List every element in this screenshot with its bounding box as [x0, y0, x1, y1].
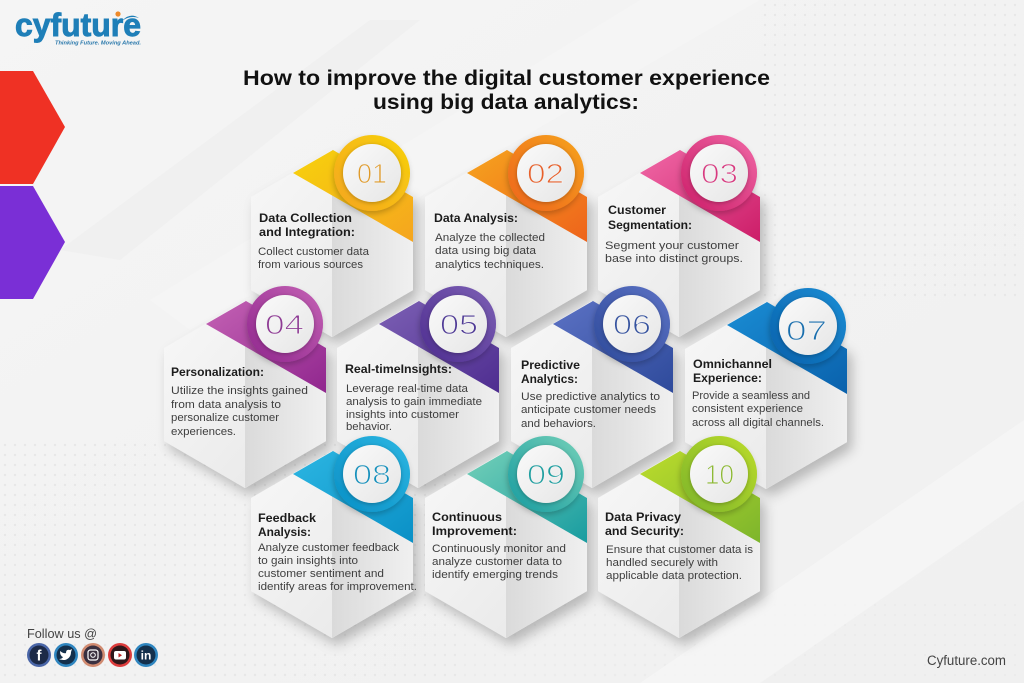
panel: 06 Predictive Analytics: Predictive	[521, 358, 580, 372]
panel: 02 Data Analysis: data using big data	[435, 245, 537, 257]
panel: 04 Personalization: 04	[265, 309, 304, 340]
panel: 08 Feedback Analysis	[251, 436, 417, 638]
panel: 03 Customer Segmentation	[598, 135, 760, 337]
panel: 05 Real-time Insights: 05	[440, 309, 478, 340]
panel: 02 Data Analysis: 02	[527, 158, 564, 189]
panel: 04 Personalization: Utilize the insights gained	[171, 385, 308, 397]
panel: 08 Feedback Analysis: customer sentiment and	[258, 568, 384, 580]
panel: 01 Data Collection and Integration: Collect customer data	[258, 246, 370, 258]
title	[243, 66, 770, 114]
panel: 07 Omnichannel Experience: across all digital channels.	[692, 417, 824, 429]
panel: 05 Real-time Insights: analysis to gain immediate	[346, 396, 482, 408]
panel: 09 Continuous Improvement: Continuously monitor and	[432, 543, 566, 555]
panel: 03 Customer Segmentation: 03	[701, 158, 738, 189]
panel: 09 Continuous Improvement: 09	[527, 459, 565, 490]
panel: 09 Continuous Improvement: Continuous	[432, 510, 502, 524]
panel: 08 Feedback Analysis: Analyze customer feedback	[258, 542, 399, 554]
panel: 02 Data Analysis: analytics techniques.	[435, 259, 544, 271]
panel: 01 Data Collection and Integration: and Integration:	[259, 225, 355, 239]
panel: 06 Predictive Analytics: anticipate customer needs	[521, 404, 656, 416]
website: Cyfuture.com	[927, 653, 1006, 668]
panel: 09 Continuous Improvement: identify emerging trends	[432, 569, 558, 581]
panel: 10 Data Privacy and Security: applicable data protection.	[606, 570, 742, 582]
panel: 04 Personalization: personalize customer	[171, 412, 279, 424]
side arrow: red	[0, 71, 65, 184]
panel: 01 Data Collection and Integration: from various sources	[258, 259, 363, 271]
panel: 10 Data Privacy and Security: 10	[705, 459, 734, 490]
panel: 06 Predictive Analytics: Analytics:	[521, 372, 578, 386]
panel: 02 Data Analysis: Data Analysis:	[434, 211, 518, 225]
panel: 04 Personalization: experiences.	[171, 426, 236, 438]
panel: 07 Omnichannel Experience: Omnichannel	[693, 357, 772, 371]
panel: 07 Omnichannel Experience: Experience:	[693, 371, 762, 385]
panel: 03 Customer Segmentation: Segment your customer	[605, 240, 739, 252]
panel: 08 Feedback Analysis: 08	[353, 459, 391, 490]
panel: 03 Customer Segmentation: Segmentation:	[608, 218, 692, 232]
panel: 10 Data Privacy and Security: and Security:	[605, 524, 684, 538]
panel: 08 Feedback Analysis: to gain insights into	[258, 555, 358, 567]
panel: 06 Predictive Analytics: 06	[613, 309, 651, 340]
panel: 06 Predictive Analytics: Use predictive analytics to	[521, 391, 660, 403]
side arrow: purple	[0, 186, 65, 299]
panel: 05 Real-time Insights: Leverage real-time data	[346, 383, 469, 395]
panel: 01 Data Collection and Integration: Data Collection	[259, 211, 352, 225]
panel: 04 Personalization	[164, 286, 326, 488]
panel: 09 Continuous Improvement	[425, 436, 587, 638]
panel: 10 Data Privacy and Security: Data Privacy	[605, 510, 681, 524]
logo: cyfuture	[15, 7, 141, 43]
social icons	[27, 643, 158, 667]
panel: 04 Personalization: Personalization:	[171, 365, 264, 379]
social icons: in	[141, 648, 151, 662]
panel: 07 Omnichannel Experience	[685, 288, 847, 489]
panel: 05 Real-time Insights: insights into customer	[346, 409, 459, 421]
logo: Thinking Future. Moving Ahead.	[55, 40, 141, 46]
panel: 07 Omnichannel Experience: Provide a seamless and	[692, 390, 810, 402]
panel: 01 Data Collection and Integration: 01	[357, 158, 387, 189]
panel: 03 Customer Segmentation: Customer	[608, 203, 666, 217]
panel: 07 Omnichannel Experience: 07	[786, 315, 827, 346]
panel: 08 Feedback Analysis: Feedback	[258, 511, 316, 525]
title: using big data analytics:	[373, 90, 639, 114]
panel: 05 Real-time Insights: behavior.	[346, 421, 392, 433]
panel: 07 Omnichannel Experience: consistent experience	[692, 403, 803, 415]
panel: 04 Personalization: from data analysis to	[171, 399, 281, 411]
panel: 01 Data Collection and Integration	[251, 135, 413, 337]
panel: 08 Feedback Analysis: identify areas for improvement.	[258, 581, 417, 593]
panel: 08 Feedback Analysis: Analysis:	[258, 525, 311, 539]
panel: 09 Continuous Improvement: Improvement:	[432, 524, 517, 538]
panel: 06 Predictive Analytics: and behaviors.	[521, 418, 596, 430]
panel: 10 Data Privacy and Security	[598, 436, 760, 638]
panel: 02 Data Analysis	[425, 135, 587, 337]
panel: 10 Data Privacy and Security: handled securely with	[606, 557, 718, 569]
panel: 02 Data Analysis: Analyze the collected	[435, 232, 545, 244]
follow us label: Follow us @	[27, 626, 97, 641]
panel: 05 Real-time Insights: Real-timeInsights:	[345, 362, 452, 376]
social icons: f	[36, 648, 42, 664]
title: How to improve the digital customer experience	[243, 66, 770, 90]
panel: 10 Data Privacy and Security: Ensure that customer data is	[606, 544, 753, 556]
panel: 06 Predictive Analytics	[511, 286, 673, 488]
panel: 03 Customer Segmentation: base into distinct groups.	[605, 253, 743, 265]
panel: 09 Continuous Improvement: analyze customer data to	[432, 556, 562, 568]
panel: 05 Real-time Insights	[337, 286, 499, 488]
